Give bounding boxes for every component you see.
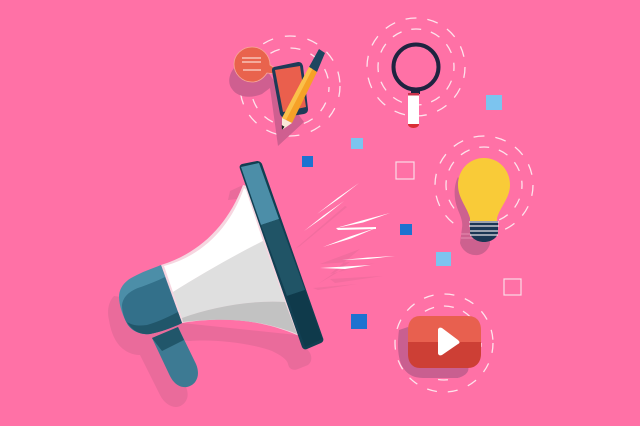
icon: phone and pencil xyxy=(229,36,340,146)
megaphone rear xyxy=(119,265,182,334)
icon: magnifying glass xyxy=(367,18,465,128)
magnifier lens xyxy=(394,44,438,90)
magnifier handle xyxy=(408,89,420,128)
phone shadow xyxy=(229,68,304,146)
video dashes xyxy=(395,294,493,392)
phone dashes xyxy=(240,36,340,136)
video screen xyxy=(408,316,481,368)
sound lines xyxy=(304,183,395,269)
megaphone handle xyxy=(152,327,198,387)
video shadow xyxy=(398,327,468,378)
bulb glass xyxy=(458,158,510,221)
bulb base xyxy=(469,221,499,242)
play triangle xyxy=(438,328,460,355)
bulb dashes xyxy=(435,136,533,234)
pencil xyxy=(282,49,325,130)
megaphone xyxy=(119,161,323,387)
megaphone bell xyxy=(161,185,304,335)
decorative squares xyxy=(302,95,521,329)
megaphone rim xyxy=(240,161,323,349)
magnifier dashes xyxy=(367,18,465,116)
megaphone shadow xyxy=(108,185,383,407)
bulb shadow xyxy=(455,177,490,255)
icon: light bulb xyxy=(435,136,533,255)
speech bubble xyxy=(234,47,287,82)
phone xyxy=(272,62,308,117)
icon: video play button xyxy=(395,294,493,392)
